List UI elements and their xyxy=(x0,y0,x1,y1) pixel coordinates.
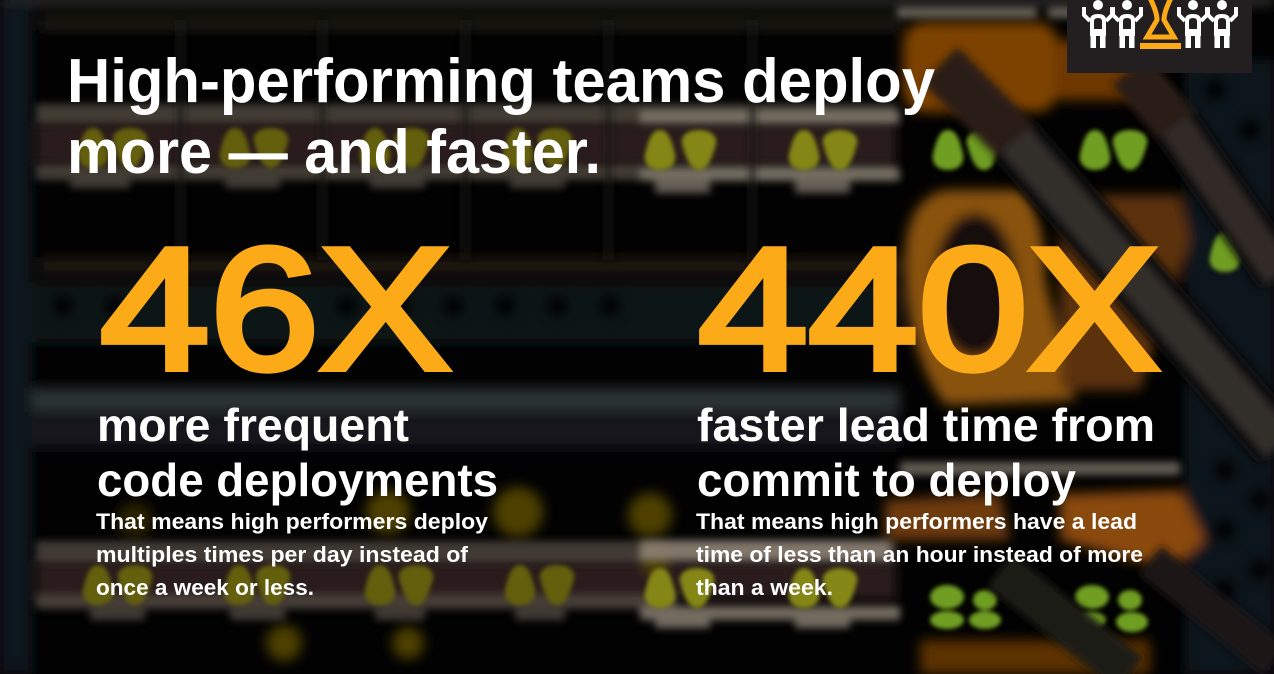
title: more — and faster. xyxy=(67,118,601,187)
right description: That means high performers have a lead xyxy=(696,509,1137,534)
right description: time of less than an hour instead of more xyxy=(696,542,1143,567)
rack dividers xyxy=(178,20,183,260)
left description: once a week or less. xyxy=(96,575,314,600)
amber glows xyxy=(117,487,672,661)
right subheading xyxy=(697,399,1155,506)
left description xyxy=(96,509,489,600)
left subheading: more frequent xyxy=(97,399,409,451)
icon: trophy xyxy=(1140,0,1181,49)
icon: third figure xyxy=(1179,0,1207,48)
icon: second figure xyxy=(1113,0,1141,48)
lit strips, bottom row xyxy=(36,541,896,620)
icon: left figure xyxy=(1084,0,1112,48)
yellow LEDs: top row xyxy=(78,128,572,168)
left description: multiples times per day instead of xyxy=(96,542,469,567)
orange ports xyxy=(903,22,1058,112)
title xyxy=(67,47,935,187)
LED row backing xyxy=(36,122,896,166)
left subheading: code deployments xyxy=(97,454,498,506)
rack bands xyxy=(0,0,1274,4)
left description: That means high performers deploy xyxy=(96,509,489,534)
lit strips, top row xyxy=(36,104,896,188)
rack holes xyxy=(53,296,73,316)
stat: 440X: 440X xyxy=(698,211,1160,406)
right description: than a week. xyxy=(696,575,833,600)
cables xyxy=(940,65,1274,674)
stat: 46X: 46X xyxy=(100,211,451,406)
logo badge xyxy=(1067,0,1252,73)
icon: fourth figure xyxy=(1208,0,1236,48)
right subheading: faster lead time from xyxy=(697,399,1155,451)
title: High-performing teams deploy xyxy=(67,47,935,116)
left subheading xyxy=(97,399,498,506)
right description xyxy=(696,509,1143,600)
right subheading: commit to deploy xyxy=(697,454,1076,506)
yellow LEDs: bottom row xyxy=(83,565,574,605)
